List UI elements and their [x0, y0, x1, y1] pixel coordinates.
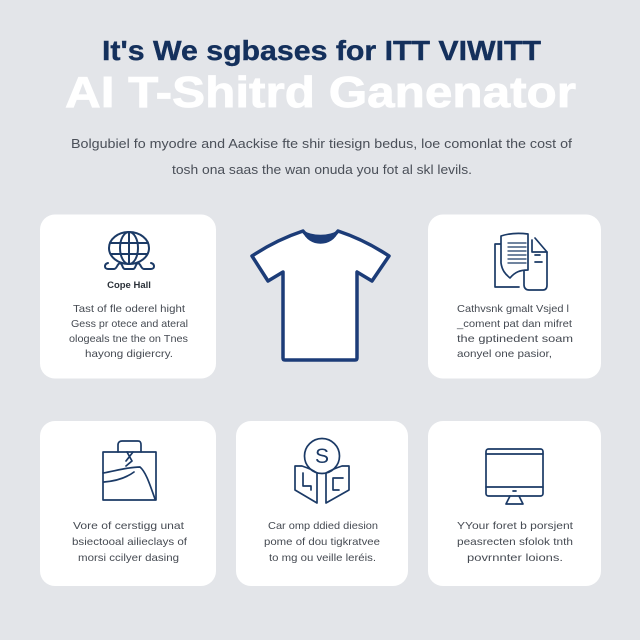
panel text: to mg ou veille leréis.: [269, 552, 376, 564]
intro text: Bolgubiel fo myodre and Aackise fte shir tiesign bedus, loe comonlat the cost of: [71, 136, 572, 151]
icon: dollar books: S: [315, 445, 329, 468]
panel: documents: [428, 214, 601, 378]
panel text: ologeals tne the on Tnes: [69, 333, 188, 345]
panel text: Car omp ddied diesion: [268, 520, 378, 532]
panel text: Cathvsnk gmalt Vsjed l: [457, 303, 569, 315]
panel text: hayong digiercry.: [85, 348, 173, 360]
panel text: pome of dou tigkratvee: [264, 536, 380, 548]
t-shirt collar: [303, 231, 338, 243]
t-shirt illustration: [252, 231, 389, 360]
panel text: Gess pr otece and ateral: [71, 318, 188, 330]
icon: documents: [495, 233, 547, 290]
icon: dollar books: [295, 438, 349, 503]
panel text: morsi ccilyer dasing: [78, 552, 179, 564]
panel text: [457, 520, 573, 564]
icon: monitor: [486, 449, 543, 504]
panel: Cope Hall: [40, 214, 216, 378]
icon: briefcase: [103, 441, 156, 500]
panel text: bsiectooal ailieclays of: [72, 536, 187, 548]
panel: dollar books: [236, 421, 408, 586]
panel heading: Cope Hall: [107, 280, 151, 291]
panel text: Vore of cerstigg unat: [73, 520, 184, 532]
intro text: tosh ona saas the wan onuda you fot al skl levils.: [172, 162, 472, 177]
panel text: povrnnter loions.: [467, 552, 563, 564]
panel text: _coment pat dan mifret: [456, 318, 572, 330]
panel text: YYour foret b porsjent: [457, 520, 573, 532]
panel text: [456, 303, 573, 360]
intro text: [71, 136, 572, 177]
panel text: peasrecten sfolok tnth: [457, 536, 573, 548]
heading: top line: It's We sgbases for ITT VIWITT: [102, 35, 541, 66]
panel text: the gptinedent soam: [457, 333, 573, 345]
panel: briefcase: [40, 421, 216, 586]
panel text: [72, 520, 187, 564]
heading: white title: AI T-Shitrd Ganenator: [65, 68, 576, 117]
panel text: aonyel one pasior,: [457, 348, 552, 360]
panel: monitor: [428, 421, 601, 586]
panel text: [69, 303, 188, 360]
icon: globe: [105, 232, 154, 269]
panel text: [264, 520, 380, 564]
panel text: Tast of fle oderel hight: [73, 303, 185, 315]
